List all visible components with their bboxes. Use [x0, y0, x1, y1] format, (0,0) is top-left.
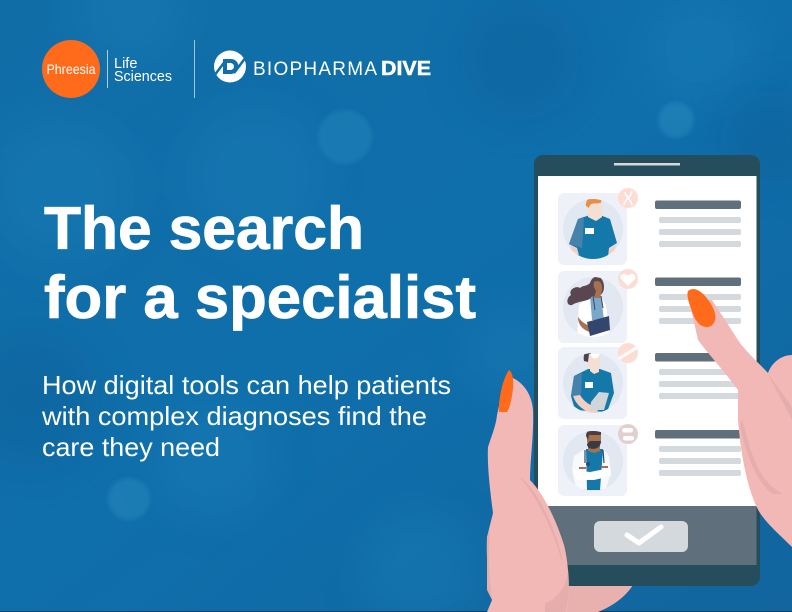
button with check mark — [594, 521, 688, 552]
list row 2 — [558, 269, 638, 343]
logo: Phreesia Life Sciences: Phreesia — [46, 61, 96, 77]
right hand with pointing finger — [687, 289, 792, 547]
palm of hand behind phone — [550, 580, 636, 612]
doctor 4 — [572, 428, 611, 490]
doctor 3 — [571, 349, 614, 413]
logo: BioPharma Dive — [214, 50, 431, 82]
text placeholder bars — [655, 200, 741, 476]
logo: Phreesia Life Sciences: Life — [114, 56, 137, 72]
list row 4 — [558, 424, 638, 496]
logo: BioPharma Dive: BIOPHARMA — [253, 59, 377, 80]
left hand with thumb — [487, 370, 569, 612]
subtitle: How digital tools can help patients — [42, 370, 451, 400]
badge: pills — [618, 424, 638, 444]
list row 3 — [558, 343, 638, 419]
doctor 1 — [569, 197, 617, 262]
title: for a specialist — [44, 264, 476, 331]
icon: BioPharma Dive mark — [214, 50, 246, 82]
doctor 2 — [567, 277, 610, 337]
subtitle — [41, 370, 451, 462]
badge: syringe — [618, 343, 638, 363]
phone — [534, 155, 760, 586]
fingernail: right hand — [687, 289, 715, 327]
subtitle: with complex diagnoses find the — [41, 401, 427, 431]
subtitle: care they need — [42, 432, 220, 462]
phone screen — [538, 176, 756, 506]
title: The search — [44, 195, 364, 262]
logo: Phreesia Life Sciences — [42, 40, 172, 98]
list row 1 — [558, 188, 638, 265]
badge: heart — [618, 269, 638, 289]
phone footer panel — [538, 506, 756, 565]
logo: BioPharma Dive: DIVE — [381, 58, 431, 80]
logo: Phreesia Life Sciences: Sciences — [114, 69, 172, 85]
badge: DNA — [618, 188, 638, 208]
fingernail: left hand — [499, 370, 513, 412]
title — [44, 195, 476, 331]
